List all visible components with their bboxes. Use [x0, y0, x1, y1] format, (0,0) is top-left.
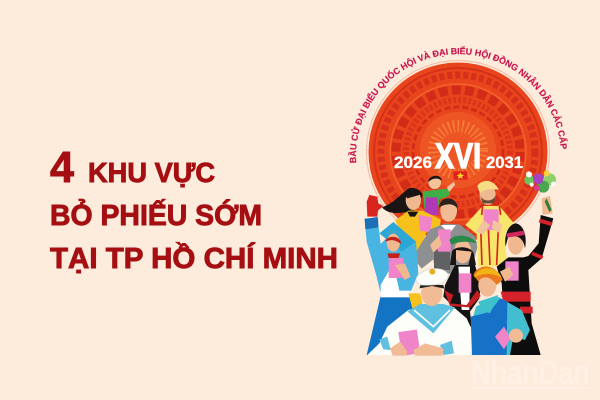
sailor [367, 269, 477, 356]
bouquet [524, 170, 556, 193]
title [50, 143, 338, 275]
elder man in turban [465, 181, 513, 267]
child [423, 176, 455, 215]
title: KHU VỰC [88, 157, 215, 188]
circular slogan: BẦU CỬ ĐẠI BIỂU QUỐC HỘI VÀ ĐẠI BIỂU HỘI ĐỒNG NHÂN DÂN CÁC CẤP [348, 46, 568, 163]
emblem numerals [394, 137, 523, 176]
woman in green hat [443, 236, 481, 327]
man in grey suit [413, 198, 477, 274]
title: BỎ PHIẾU SỚM [50, 198, 262, 232]
people illustration [365, 170, 556, 356]
flag [453, 171, 467, 180]
emblem numerals: 2026 [394, 154, 432, 172]
emblem numerals: 2031 [486, 154, 523, 172]
title: TẠI TP HỒ CHÍ MINH [50, 241, 338, 275]
emblem numerals: XVI [435, 137, 481, 176]
title: 4 [50, 143, 75, 192]
woman in yellow [382, 188, 441, 257]
woman in blue with raised hand [365, 195, 423, 355]
worker [471, 267, 530, 355]
bronze drum emblem [366, 60, 550, 244]
woman in black with flowers [497, 196, 553, 355]
